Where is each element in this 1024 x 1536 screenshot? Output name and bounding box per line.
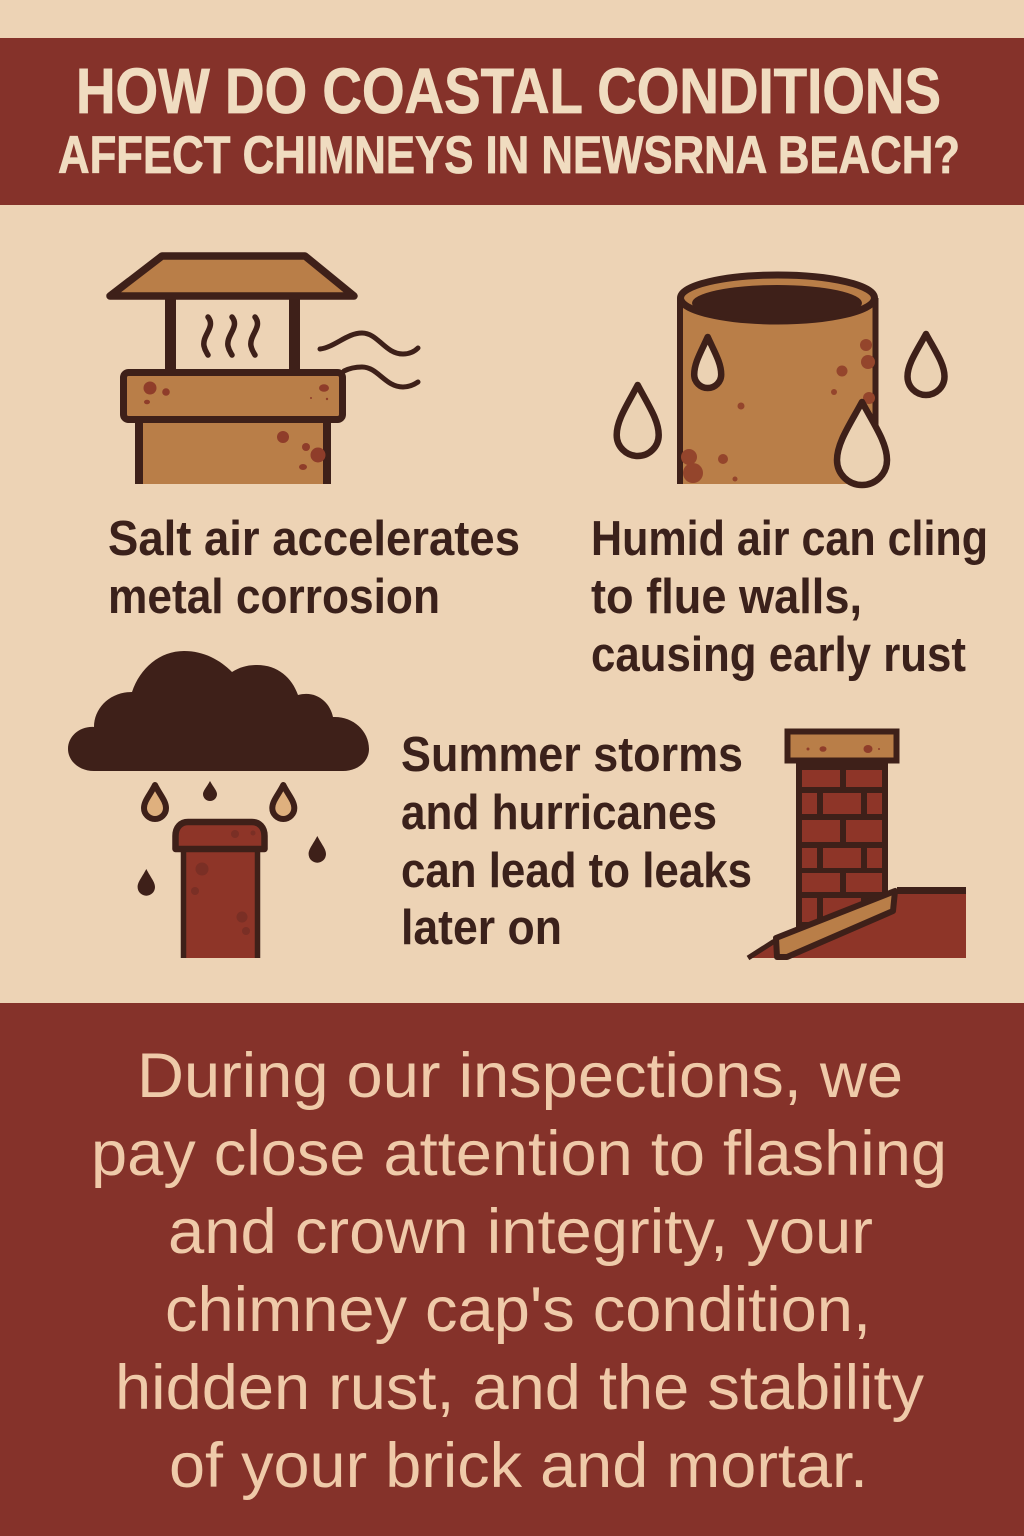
caption: summer storms: later on <box>401 901 562 955</box>
caption: summer storms <box>401 728 752 955</box>
caption: summer storms: and hurricanes <box>401 786 717 840</box>
footer text: hidden rust, and the stability <box>115 1353 925 1423</box>
caption: humid air: causing early rust <box>591 628 966 682</box>
caption: salt air <box>108 512 520 624</box>
footer text: of your brick and mortar. <box>169 1431 868 1501</box>
icon: humid flue with droplets <box>617 275 944 485</box>
footer text: chimney cap's condition, <box>165 1275 871 1345</box>
caption: humid air: to flue walls, <box>591 570 862 624</box>
caption: summer storms: can lead to leaks <box>401 844 752 898</box>
footer text: pay close attention to flashing <box>91 1119 947 1189</box>
header banner <box>0 38 1024 205</box>
footer text: During our inspections, we <box>137 1041 903 1111</box>
caption: salt air: Salt air accelerates <box>108 512 520 566</box>
icon: brick chimney on roof <box>748 732 966 958</box>
caption: salt air: metal corrosion <box>108 570 440 624</box>
icon: chimney cap with salt air <box>110 256 418 484</box>
caption: summer storms: Summer storms <box>401 728 743 782</box>
caption: humid air <box>591 512 988 682</box>
icon: storm cloud over chimney <box>68 651 369 958</box>
title <box>58 55 960 185</box>
footer panel <box>0 1003 1024 1536</box>
footer text <box>91 1041 947 1501</box>
footer text: and crown integrity, your <box>168 1197 873 1267</box>
